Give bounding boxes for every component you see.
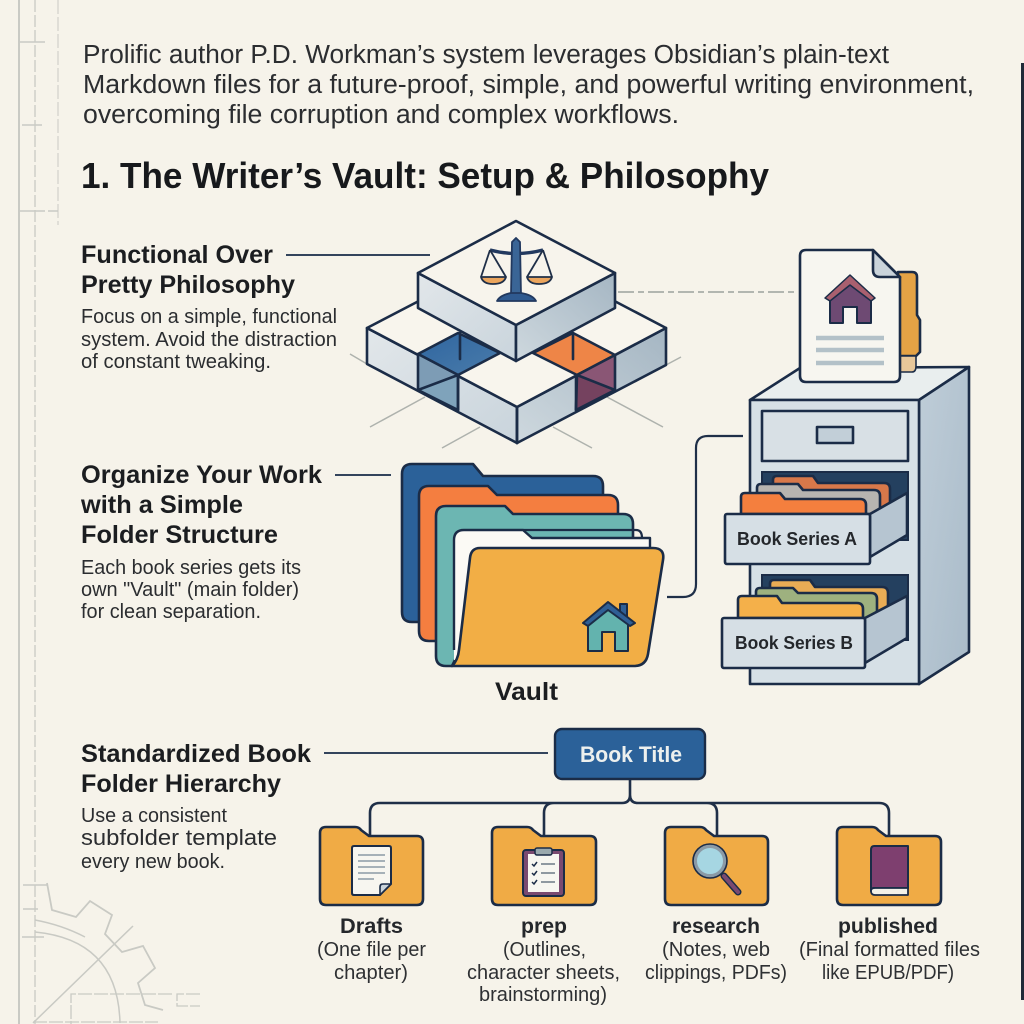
text block: standardized hierarchy: Standardized Book — [81, 740, 311, 768]
text block: organize your work: with a Simple — [80, 491, 243, 519]
folder labels: (Outlines, — [503, 939, 586, 961]
folder labels: brainstorming) — [479, 984, 607, 1006]
text block: organize your work: Organize Your Work — [81, 461, 322, 489]
book title box — [555, 729, 705, 779]
text block: functional over pretty: system. Avoid the distraction — [81, 329, 337, 351]
text block: organize your work: Folder Structure — [81, 521, 278, 549]
leader line: organize — [335, 474, 391, 476]
leader line: hierarchy — [324, 752, 548, 754]
bookmark tab behind document — [898, 272, 920, 372]
intro paragraph — [83, 41, 974, 129]
folder labels: chapter) — [334, 962, 408, 984]
folder labels: character sheets, — [467, 962, 620, 984]
intro paragraph: Prolific author P.D. Workman’s system leverages Obsidian’s plain-text — [83, 41, 889, 69]
text block: organize your work: own "Vault" (main folder) — [81, 579, 299, 601]
icon: clipboard — [523, 848, 564, 896]
icon: teal house — [583, 602, 635, 651]
folder labels: (Final formatted files — [799, 939, 980, 961]
folder labels: like EPUB/PDF) — [822, 962, 954, 984]
connector tree — [370, 779, 889, 836]
folder: prep — [492, 827, 596, 905]
connector: vault to cabinet — [667, 436, 743, 597]
vault label: Vault — [495, 678, 559, 706]
drawer: book series A: Book Series A — [737, 528, 857, 549]
intro paragraph: Markdown files for a future-proof, simple, and powerful writing environment, — [83, 71, 974, 99]
book title box: Book Title — [580, 742, 682, 767]
document with house icon — [800, 250, 900, 382]
folder: research — [665, 827, 768, 905]
text block: functional over pretty — [81, 241, 337, 373]
icon: book — [871, 846, 908, 895]
icon: document — [352, 846, 391, 895]
icon: magnifier — [693, 844, 738, 892]
cabinet body — [750, 367, 969, 684]
text block: organize your work — [80, 461, 322, 623]
text block: standardized hierarchy: subfolder template — [81, 825, 277, 850]
text block: organize your work: for clean separation. — [81, 601, 261, 623]
drawer: book series B — [722, 575, 908, 668]
drawer: book series A — [725, 472, 908, 564]
filing cabinet — [722, 250, 969, 684]
section heading: 1. The Writer’s Vault: Setup & Philosophy — [81, 155, 769, 196]
text block: functional over pretty: Functional Over — [81, 241, 273, 269]
folder labels: (Notes, web — [662, 939, 770, 961]
isometric block stack with scales — [350, 221, 681, 448]
intro paragraph: overcoming file corruption and complex workflows. — [83, 101, 679, 129]
text block: standardized hierarchy — [81, 740, 311, 873]
text block: functional over pretty: Pretty Philosophy — [81, 271, 295, 299]
icon: balance scales — [481, 238, 552, 301]
folder: published — [837, 827, 941, 905]
text block: standardized hierarchy: Folder Hierarchy — [81, 770, 281, 798]
text block: functional over pretty: of constant tweaking. — [81, 351, 271, 373]
drawer: book series B: Book Series B — [735, 632, 853, 653]
folder labels: research — [672, 915, 760, 938]
folder labels: prep — [521, 915, 567, 938]
folder labels: clippings, PDFs) — [645, 962, 787, 984]
leader line: philosophy — [286, 254, 430, 256]
text block: standardized hierarchy: Use a consistent — [81, 805, 227, 827]
top drawer — [762, 411, 908, 461]
vault folder stack — [402, 464, 663, 666]
dashed connector: block to document — [618, 291, 795, 293]
folder labels: (One file per — [317, 939, 426, 961]
text block: organize your work: Each book series gets its — [81, 557, 301, 579]
text block: functional over pretty: Focus on a simple, functional — [81, 306, 337, 328]
lower layer blocks — [367, 250, 666, 443]
folder labels: published — [838, 915, 938, 938]
top block — [418, 221, 615, 361]
text block: standardized hierarchy: every new book. — [81, 851, 225, 873]
folder labels: Drafts — [340, 915, 403, 938]
folder: drafts — [320, 827, 423, 905]
folder labels — [317, 915, 980, 1006]
